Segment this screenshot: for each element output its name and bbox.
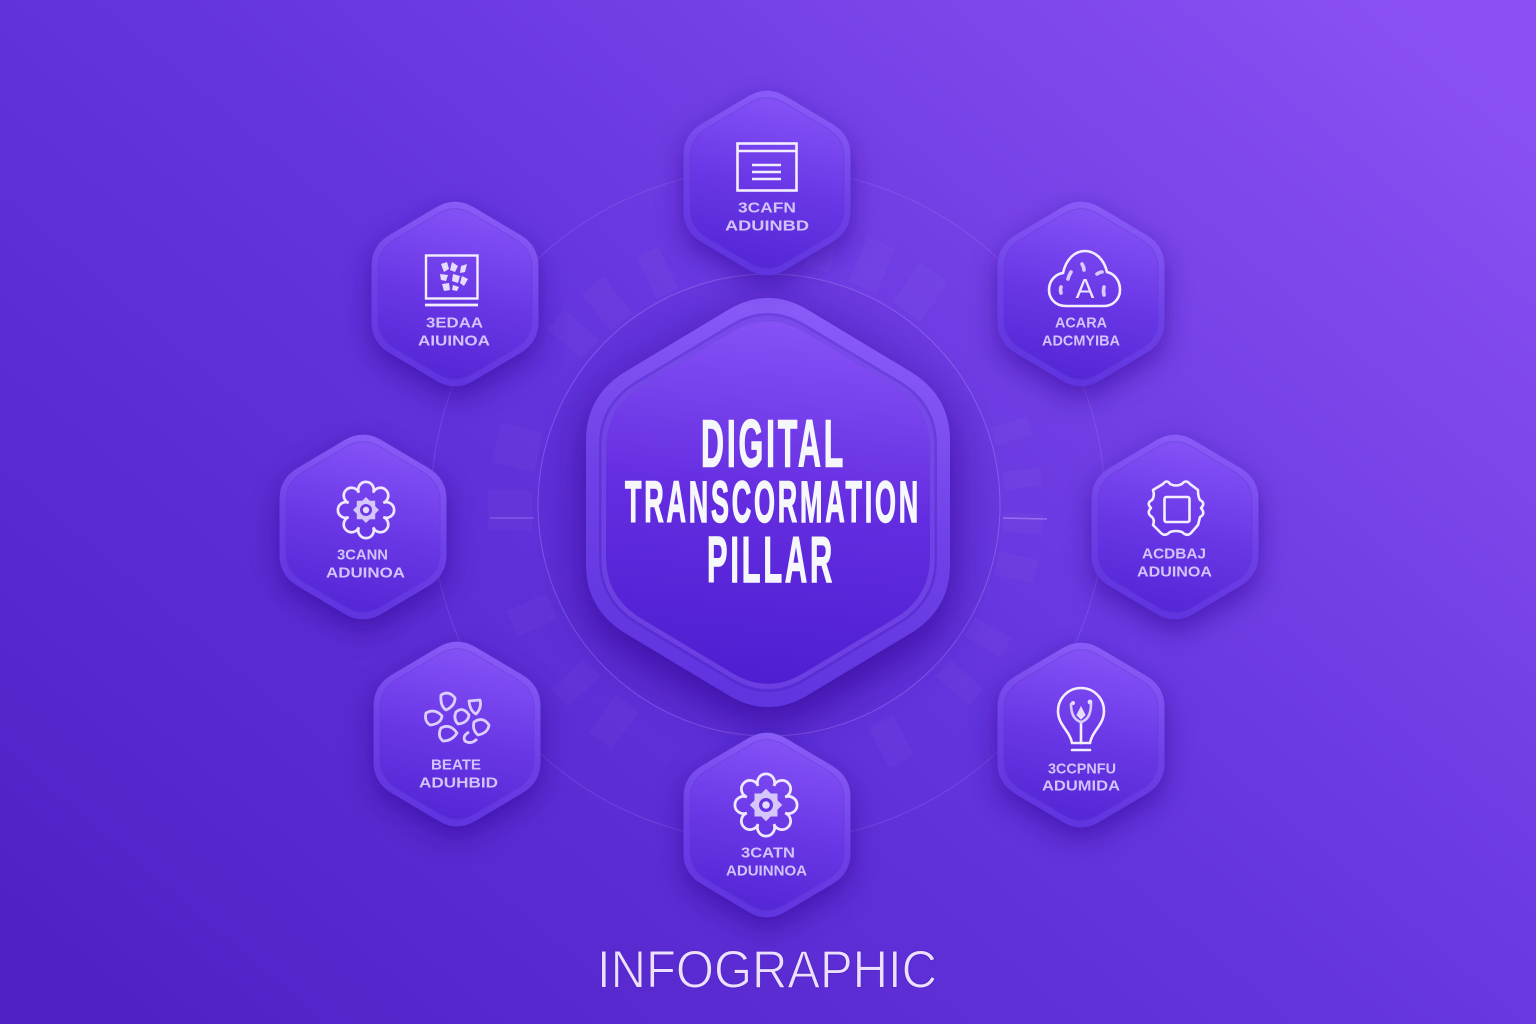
- label: [725, 200, 809, 234]
- label: [418, 314, 490, 350]
- label: ADUINNOA: [726, 862, 807, 880]
- panel: bottom left hexagon: [373, 642, 541, 837]
- panel: top right hexagon: [997, 202, 1165, 397]
- title: DIGITAL: [701, 406, 846, 482]
- label: 3CAFN: [738, 200, 796, 216]
- label: ADUINBD: [725, 218, 809, 234]
- icon: chip gear: [1149, 482, 1203, 535]
- label: ADUMIDA: [1042, 778, 1120, 794]
- icon: flower gear: [735, 774, 797, 836]
- label: 3CATN: [741, 844, 795, 862]
- icon: framed pixel pattern: [425, 256, 478, 305]
- label: ACDBAJ: [1142, 546, 1206, 562]
- label: [1137, 546, 1212, 580]
- panel: left hexagon: [279, 435, 447, 630]
- inner ring: [538, 274, 1000, 736]
- label: ADUINOA: [1137, 564, 1212, 580]
- panel: top left hexagon: [371, 202, 539, 397]
- label: [419, 756, 498, 792]
- panel: bottom hexagon: [683, 733, 851, 928]
- label: BEATE: [431, 756, 481, 774]
- icon: cloud: [1049, 251, 1120, 306]
- icon: flower gear: [338, 482, 394, 538]
- panel: right hexagon: [1091, 435, 1259, 630]
- panel: top hexagon: [683, 91, 851, 286]
- label: ADUHBID: [419, 774, 498, 792]
- label: AIUINOA: [418, 332, 490, 350]
- label: 3EDAA: [426, 314, 483, 332]
- label: 3CANN: [337, 546, 388, 564]
- central hexagon body: [584, 298, 952, 725]
- panel: central hexagon: TRANSCORMATION: [625, 470, 921, 535]
- label: [1042, 314, 1120, 350]
- label: [326, 546, 405, 582]
- label: 3CCPNFU: [1048, 760, 1116, 778]
- icon: cell cluster: [426, 693, 489, 743]
- title: [625, 406, 921, 596]
- panel: central hexagon: [584, 298, 952, 725]
- icon: browser window: [738, 144, 796, 190]
- label: [1042, 760, 1120, 794]
- footer heading: INFOGRAPHIC: [597, 940, 937, 1000]
- label: [726, 844, 807, 880]
- label: ACARA: [1055, 314, 1107, 332]
- outer ring: [431, 168, 1105, 842]
- icon: cloud: A: [1076, 273, 1095, 304]
- title: PILLAR: [707, 523, 835, 596]
- label: ADCMYIBA: [1042, 332, 1120, 350]
- left tick: [490, 517, 534, 519]
- icon: light bulb: [1058, 688, 1104, 750]
- radial background blocks: [488, 228, 1043, 768]
- panel: bottom right hexagon: [997, 643, 1165, 838]
- right tick: [1003, 518, 1047, 519]
- label: ADUINOA: [326, 564, 405, 582]
